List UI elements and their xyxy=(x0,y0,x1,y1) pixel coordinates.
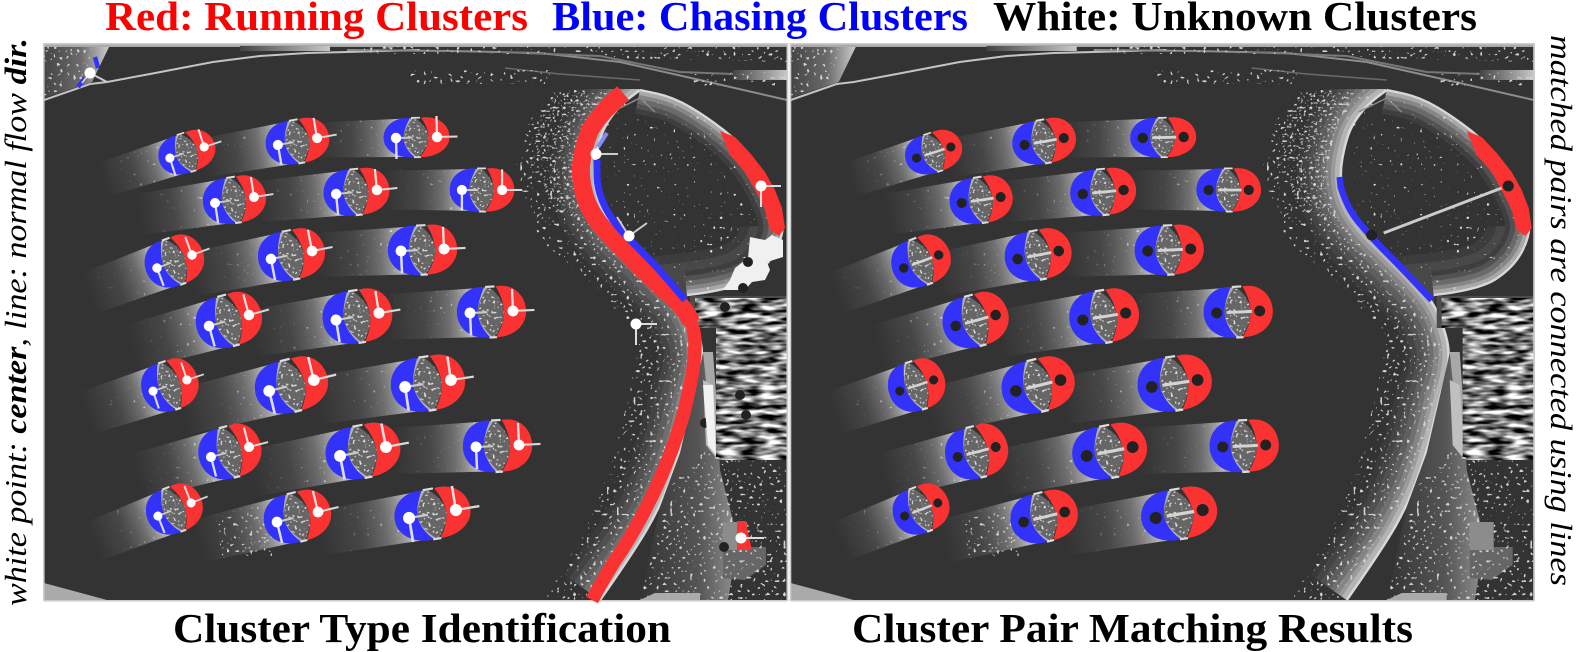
right side note: matched pairs are connected using lines xyxy=(1544,35,1578,586)
white centers and normal flow lines xyxy=(143,115,542,544)
panel: cluster type identification xyxy=(43,43,788,602)
dark points near wall xyxy=(700,257,753,552)
caption: cluster pair matching results: Cluster Pair Matching Results xyxy=(852,605,1413,651)
white centers on the boundary and background xyxy=(590,148,781,544)
matched pair points on large object xyxy=(1366,180,1514,240)
bright wall strip xyxy=(703,385,716,455)
light blue fragment xyxy=(598,133,607,147)
caption: cluster type identification: Cluster Type Identification xyxy=(173,605,671,651)
red running boundary xyxy=(581,93,695,600)
blue chasing boundary xyxy=(597,160,685,300)
matched pair line on large object xyxy=(1384,188,1502,233)
white blobs near wall xyxy=(723,235,783,290)
red cluster on box xyxy=(737,521,752,550)
top-left unknown cluster xyxy=(78,57,107,87)
dark centers and matching lines xyxy=(894,132,1271,528)
blue matched boundary xyxy=(1340,177,1432,300)
title legend xyxy=(105,0,1477,39)
panel: cluster pair matching results xyxy=(790,43,1535,602)
